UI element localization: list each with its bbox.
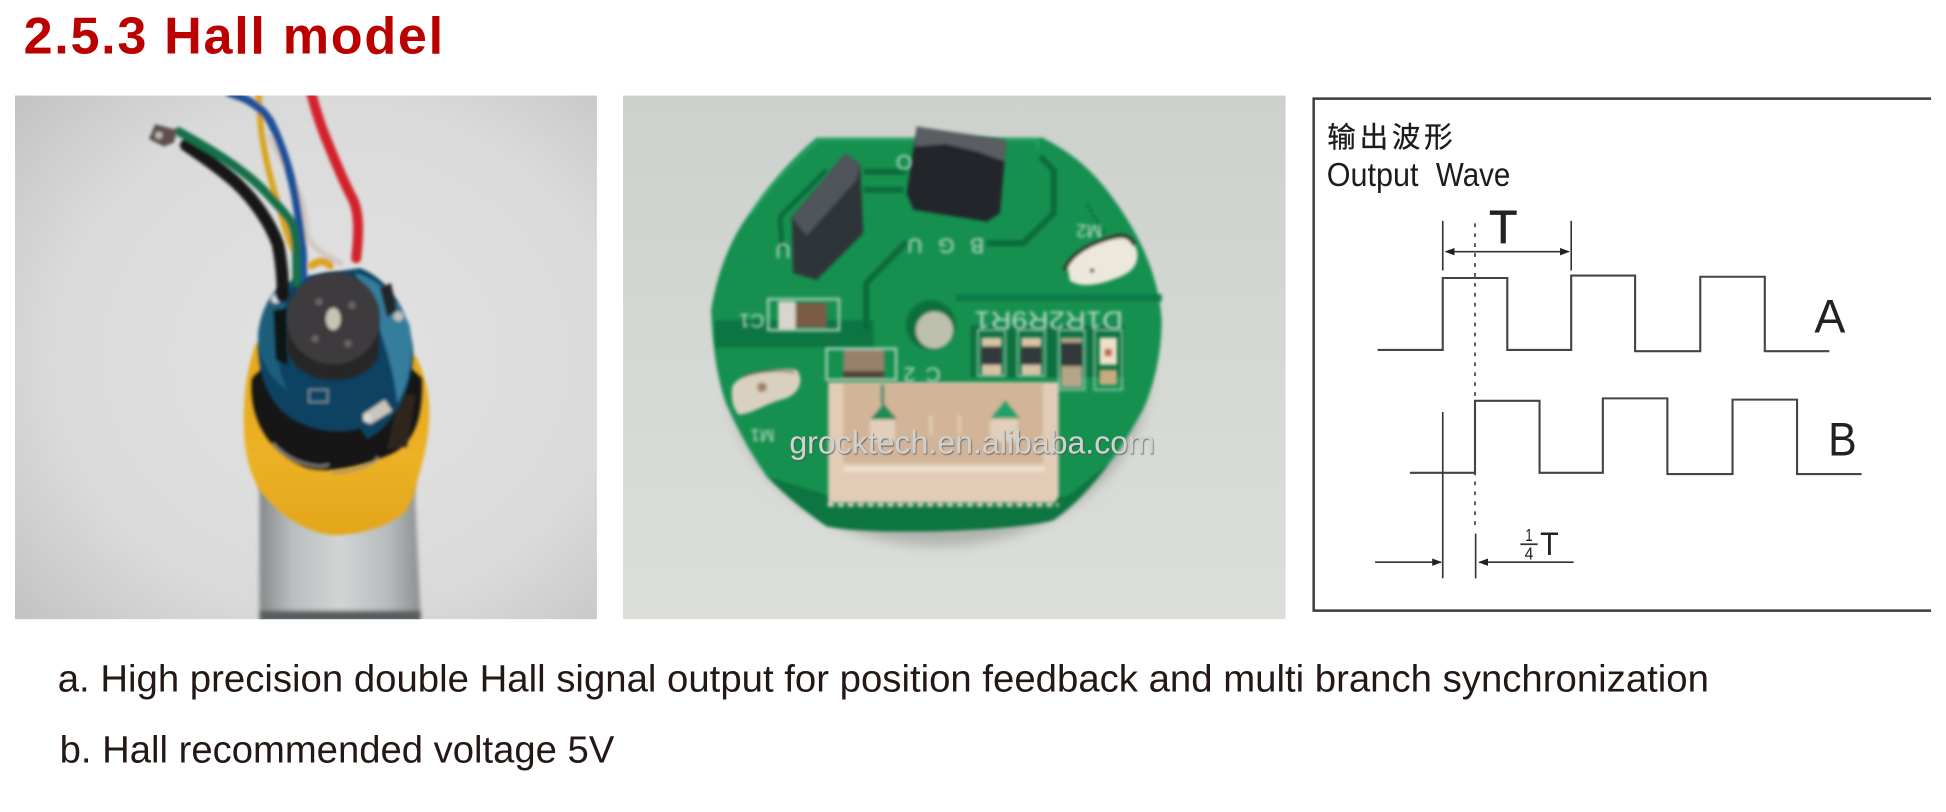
photo: motor with hall encoder and wires [15,87,597,622]
chart heading: 输出波形 [1327,122,1453,154]
board silkscreen labels [739,150,1123,445]
wave labels: B [1828,412,1857,465]
quarter T label: 1 [1525,525,1533,545]
board silkscreen labels: C2 [904,362,941,385]
chart frame [1314,99,1931,611]
quarter T label: 4 [1525,544,1534,564]
wave labels: T [1489,201,1517,253]
magnet disc [287,272,380,380]
period marker T [1443,221,1571,271]
yellow tape [244,335,429,535]
wires [179,87,358,295]
board silkscreen labels: M2 [1076,221,1102,242]
board silkscreen labels: BGU [907,233,984,256]
title: 2.5.3 Hall model [24,7,443,65]
board silkscreen labels: M1 [750,425,774,445]
motor can [259,484,421,622]
waveform A [1378,276,1829,351]
board silkscreen labels: O [896,150,912,173]
watermark: grocktech.en.alibaba.com [789,424,1155,460]
chart heading: Output [1327,157,1419,194]
waveform B [1410,398,1862,474]
dotted reference line [1474,223,1476,531]
board silkscreen labels: C1 [739,309,765,331]
wave labels: A [1814,290,1846,343]
capacitors [768,299,896,380]
stripped wire tip [149,124,177,146]
board silkscreen labels: D1R2R9R1 [974,306,1123,333]
green board [711,138,1162,532]
chart: output waveform [1314,99,1931,611]
photo: green hall circuit board [623,96,1286,619]
solder pads [732,205,1137,415]
wave labels [1489,201,1857,465]
chart heading [1327,122,1510,194]
hall sensor chips [792,127,1007,280]
text: feature a: a. High precision double Hall signal output for position feedback and multi branch synchronization [58,659,1709,701]
white connector [828,382,1059,505]
board silkscreen labels: U [775,238,791,261]
board shadow [729,390,1152,551]
black ring [251,354,422,473]
quarter period marker [1375,412,1574,578]
blue circuit board [258,268,413,439]
resistors and LED [978,330,1122,390]
text: feature b: b. Hall recommended voltage 5V [60,729,615,771]
chart heading: Wave [1436,157,1510,194]
quarter T label: T [1540,526,1559,562]
quarter T label [1525,525,1559,564]
mounting hole [906,300,956,350]
